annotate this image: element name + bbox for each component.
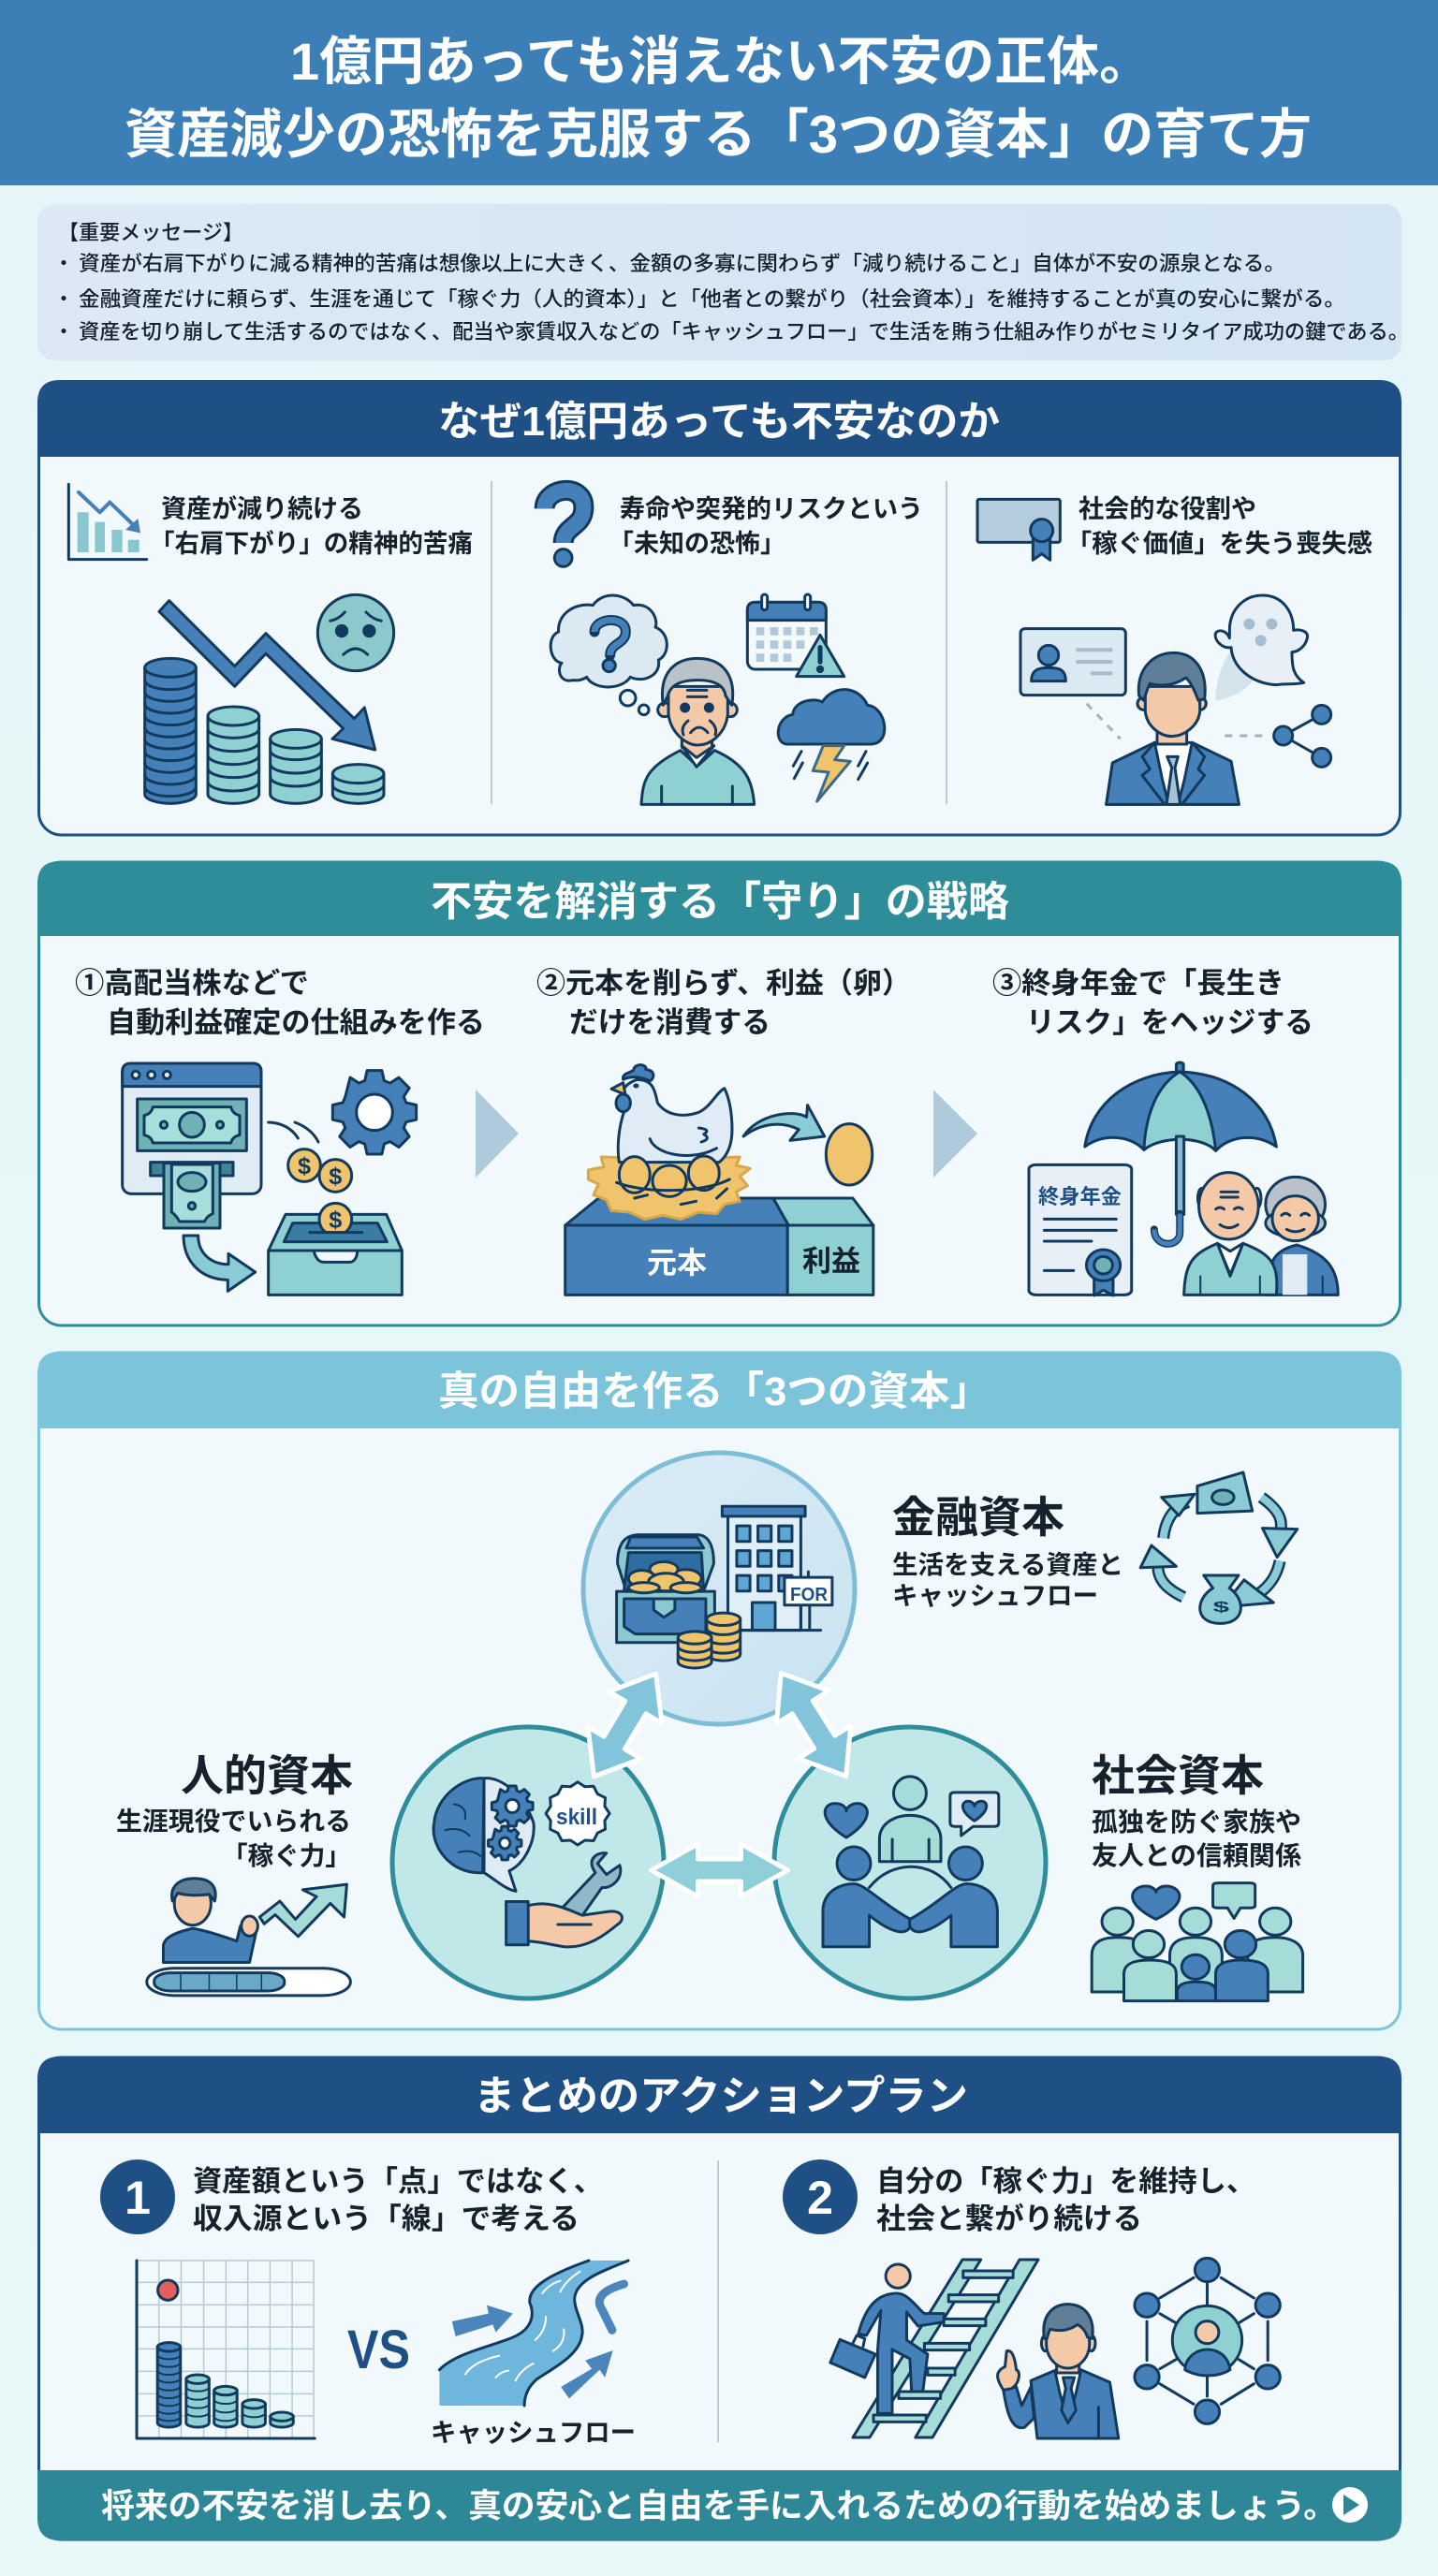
key messages box: 【重要メッセージ】	[58, 221, 243, 244]
column 2 title	[609, 495, 923, 558]
column 2 title: 寿命や突発的リスクという	[620, 495, 923, 523]
column 1 title: 資産が減り続ける	[161, 494, 363, 523]
key messages box: 資産を切り崩して生活するのではなく、配当や家賃収入などの「キャッシュフロー」で生活を賄う仕組み作りがセミリタイア成功の鍵である。	[79, 320, 1409, 344]
action 1: 資産額という「点」ではなく、	[193, 2165, 603, 2198]
step 2 title	[536, 967, 911, 1039]
label: cash flow: キャッシュフロー	[431, 2418, 636, 2447]
panel: defensive strategy	[37, 861, 1401, 1325]
key messages box: ・	[53, 320, 74, 344]
panel heading: action plan: まとめのアクションプラン	[474, 2073, 968, 2119]
title banner	[0, 0, 1438, 185]
illustration: businessman pointing up	[998, 2305, 1119, 2438]
step 2 title: ②元本を削らず、利益（卵）	[536, 967, 911, 1000]
key messages box: 資産が右肩下がりに減る精神的苦痛は想像以上に大きく、金額の多寡に関わらず「減り続けること」自体が不安の源泉となる。	[79, 252, 1285, 275]
illustration: automatic income machine	[123, 1063, 417, 1295]
label: principal: 元本	[647, 1246, 707, 1280]
action 1: 1	[125, 2172, 151, 2224]
icon: community group	[1092, 1883, 1303, 2001]
vs label: VS	[347, 2320, 410, 2380]
label: financial capital	[892, 1493, 1123, 1610]
arrow: step 1 to 2	[476, 1090, 519, 1178]
circle: financial capital	[583, 1453, 855, 1724]
arrow: human and social	[652, 1844, 788, 1896]
illustration: automatic income machine: $	[329, 1164, 342, 1190]
illustration: worried elderly man with risks	[550, 594, 885, 804]
circle: human capital	[392, 1727, 664, 1998]
column 2 title: 「未知の恐怖」	[609, 530, 785, 558]
icon: certificate with ribbon	[977, 499, 1060, 560]
label: human capital	[116, 1751, 353, 1870]
column 1 title: 「右肩下がり」の精神的苦痛	[150, 529, 473, 558]
illustration: automatic income machine: $	[298, 1153, 311, 1179]
label: financial capital: 金融資本	[892, 1493, 1064, 1542]
label: social capital: 社会資本	[1092, 1751, 1264, 1800]
icon: money cycle	[1140, 1472, 1298, 1623]
key messages box: ・	[53, 252, 74, 275]
label: social capital	[1092, 1751, 1301, 1870]
key messages box: ・	[53, 287, 74, 311]
arrow: step 2 to 3	[933, 1090, 977, 1178]
arrow: financial and human	[567, 1658, 682, 1793]
action 1	[100, 2159, 603, 2235]
step 1 title: 自動利益確定の仕組みを作る	[107, 1006, 485, 1039]
panel heading: defensive strategy	[37, 861, 1401, 936]
icon: question mark	[545, 490, 583, 566]
panel heading: why anxious	[37, 380, 1401, 457]
panel heading: why anxious: なぜ1億円あっても不安なのか	[438, 399, 1000, 445]
action 2: 2	[807, 2172, 833, 2224]
illustration: falling coins and arrow	[145, 594, 394, 803]
chart: point versus stacks	[137, 2261, 315, 2438]
step 2 title: だけを消費する	[569, 1006, 770, 1039]
icon: play button	[1332, 2487, 1368, 2523]
label: financial capital: キャッシュフロー	[892, 1581, 1098, 1610]
call to action strip: 将来の不安を消し去り、真の安心と自由を手に入れるための行動を始めましょう。	[101, 2487, 1337, 2525]
column 1 title	[150, 494, 473, 558]
action 2	[783, 2159, 1255, 2235]
illustration: businessman losing role	[1020, 595, 1331, 804]
arrow: financial and social	[755, 1657, 873, 1793]
panel: three capitals	[37, 1352, 1401, 2029]
label: human capital: 生涯現役でいられる	[116, 1807, 351, 1836]
step 3 title	[992, 967, 1313, 1039]
title banner: 1億円あっても消えない不安の正体。	[290, 32, 1152, 91]
step 3 title: リスク」をヘッジする	[1026, 1006, 1313, 1039]
label: financial capital: 生活を支える資産と	[892, 1550, 1123, 1579]
label: social capital: 孤独を防ぐ家族や	[1092, 1808, 1301, 1837]
illustration: hen on nest and principal box	[565, 1065, 873, 1295]
icon: small falling chart	[68, 484, 147, 560]
action 1: 収入源という「線」で考える	[193, 2203, 580, 2235]
illustration: climbing ladder	[830, 2260, 1038, 2437]
key messages box: 金融資産だけに頼らず、生涯を通じて「稼ぐ力（人的資本）」と「他者との繋がり（社会資本）」を維持することが真の安心に繋がる。	[79, 287, 1345, 311]
step 1 title: ①高配当株などで	[75, 967, 309, 1000]
column 3 title	[1066, 495, 1372, 558]
label: social capital: 友人との信頼関係	[1092, 1841, 1301, 1870]
step 3 title: ③終身年金で「長生き	[992, 967, 1284, 1000]
title banner: 資産減少の恐怖を克服する「3つの資本」の育て方	[125, 105, 1312, 165]
key messages box	[37, 204, 1409, 360]
illustration: umbrella, pension certificate and couple	[1029, 1062, 1338, 1295]
illustration: social network	[1135, 2258, 1280, 2423]
panel: why anxious	[37, 380, 1401, 835]
label: human capital: 「稼ぐ力」	[222, 1841, 351, 1870]
panel heading: action plan	[37, 2056, 1401, 2133]
column 3 title: 社会的な役割や	[1078, 495, 1256, 523]
panel heading: three capitals	[37, 1352, 1401, 1428]
illustration: automatic income machine: $	[329, 1208, 342, 1234]
action 2: 社会と繋がり続ける	[876, 2203, 1142, 2235]
panel heading: three capitals: 真の自由を作る「3つの資本」	[438, 1369, 990, 1414]
panel heading: defensive strategy: 不安を解消する「守り」の戦略	[431, 879, 1009, 925]
column 3 title: 「稼ぐ価値」を失う喪失感	[1066, 530, 1372, 558]
circle: social capital	[774, 1727, 1046, 1998]
illustration: cash flow river	[439, 2261, 628, 2406]
icon: working person with trend and bar	[147, 1879, 350, 1996]
icon: money cycle: $	[1213, 1600, 1229, 1616]
label: profit: 利益	[802, 1245, 860, 1278]
step 1 title	[75, 967, 485, 1039]
panel: action plan	[37, 2056, 1401, 2540]
action 2: 自分の「稼ぐ力」を維持し、	[876, 2165, 1255, 2198]
circle: financial capital: FOR	[790, 1585, 829, 1605]
certificate label: 終身年金	[1038, 1185, 1122, 1208]
label: human capital: 人的資本	[181, 1751, 353, 1800]
circle: human capital: skill	[556, 1805, 597, 1830]
call to action strip	[37, 2470, 1401, 2540]
